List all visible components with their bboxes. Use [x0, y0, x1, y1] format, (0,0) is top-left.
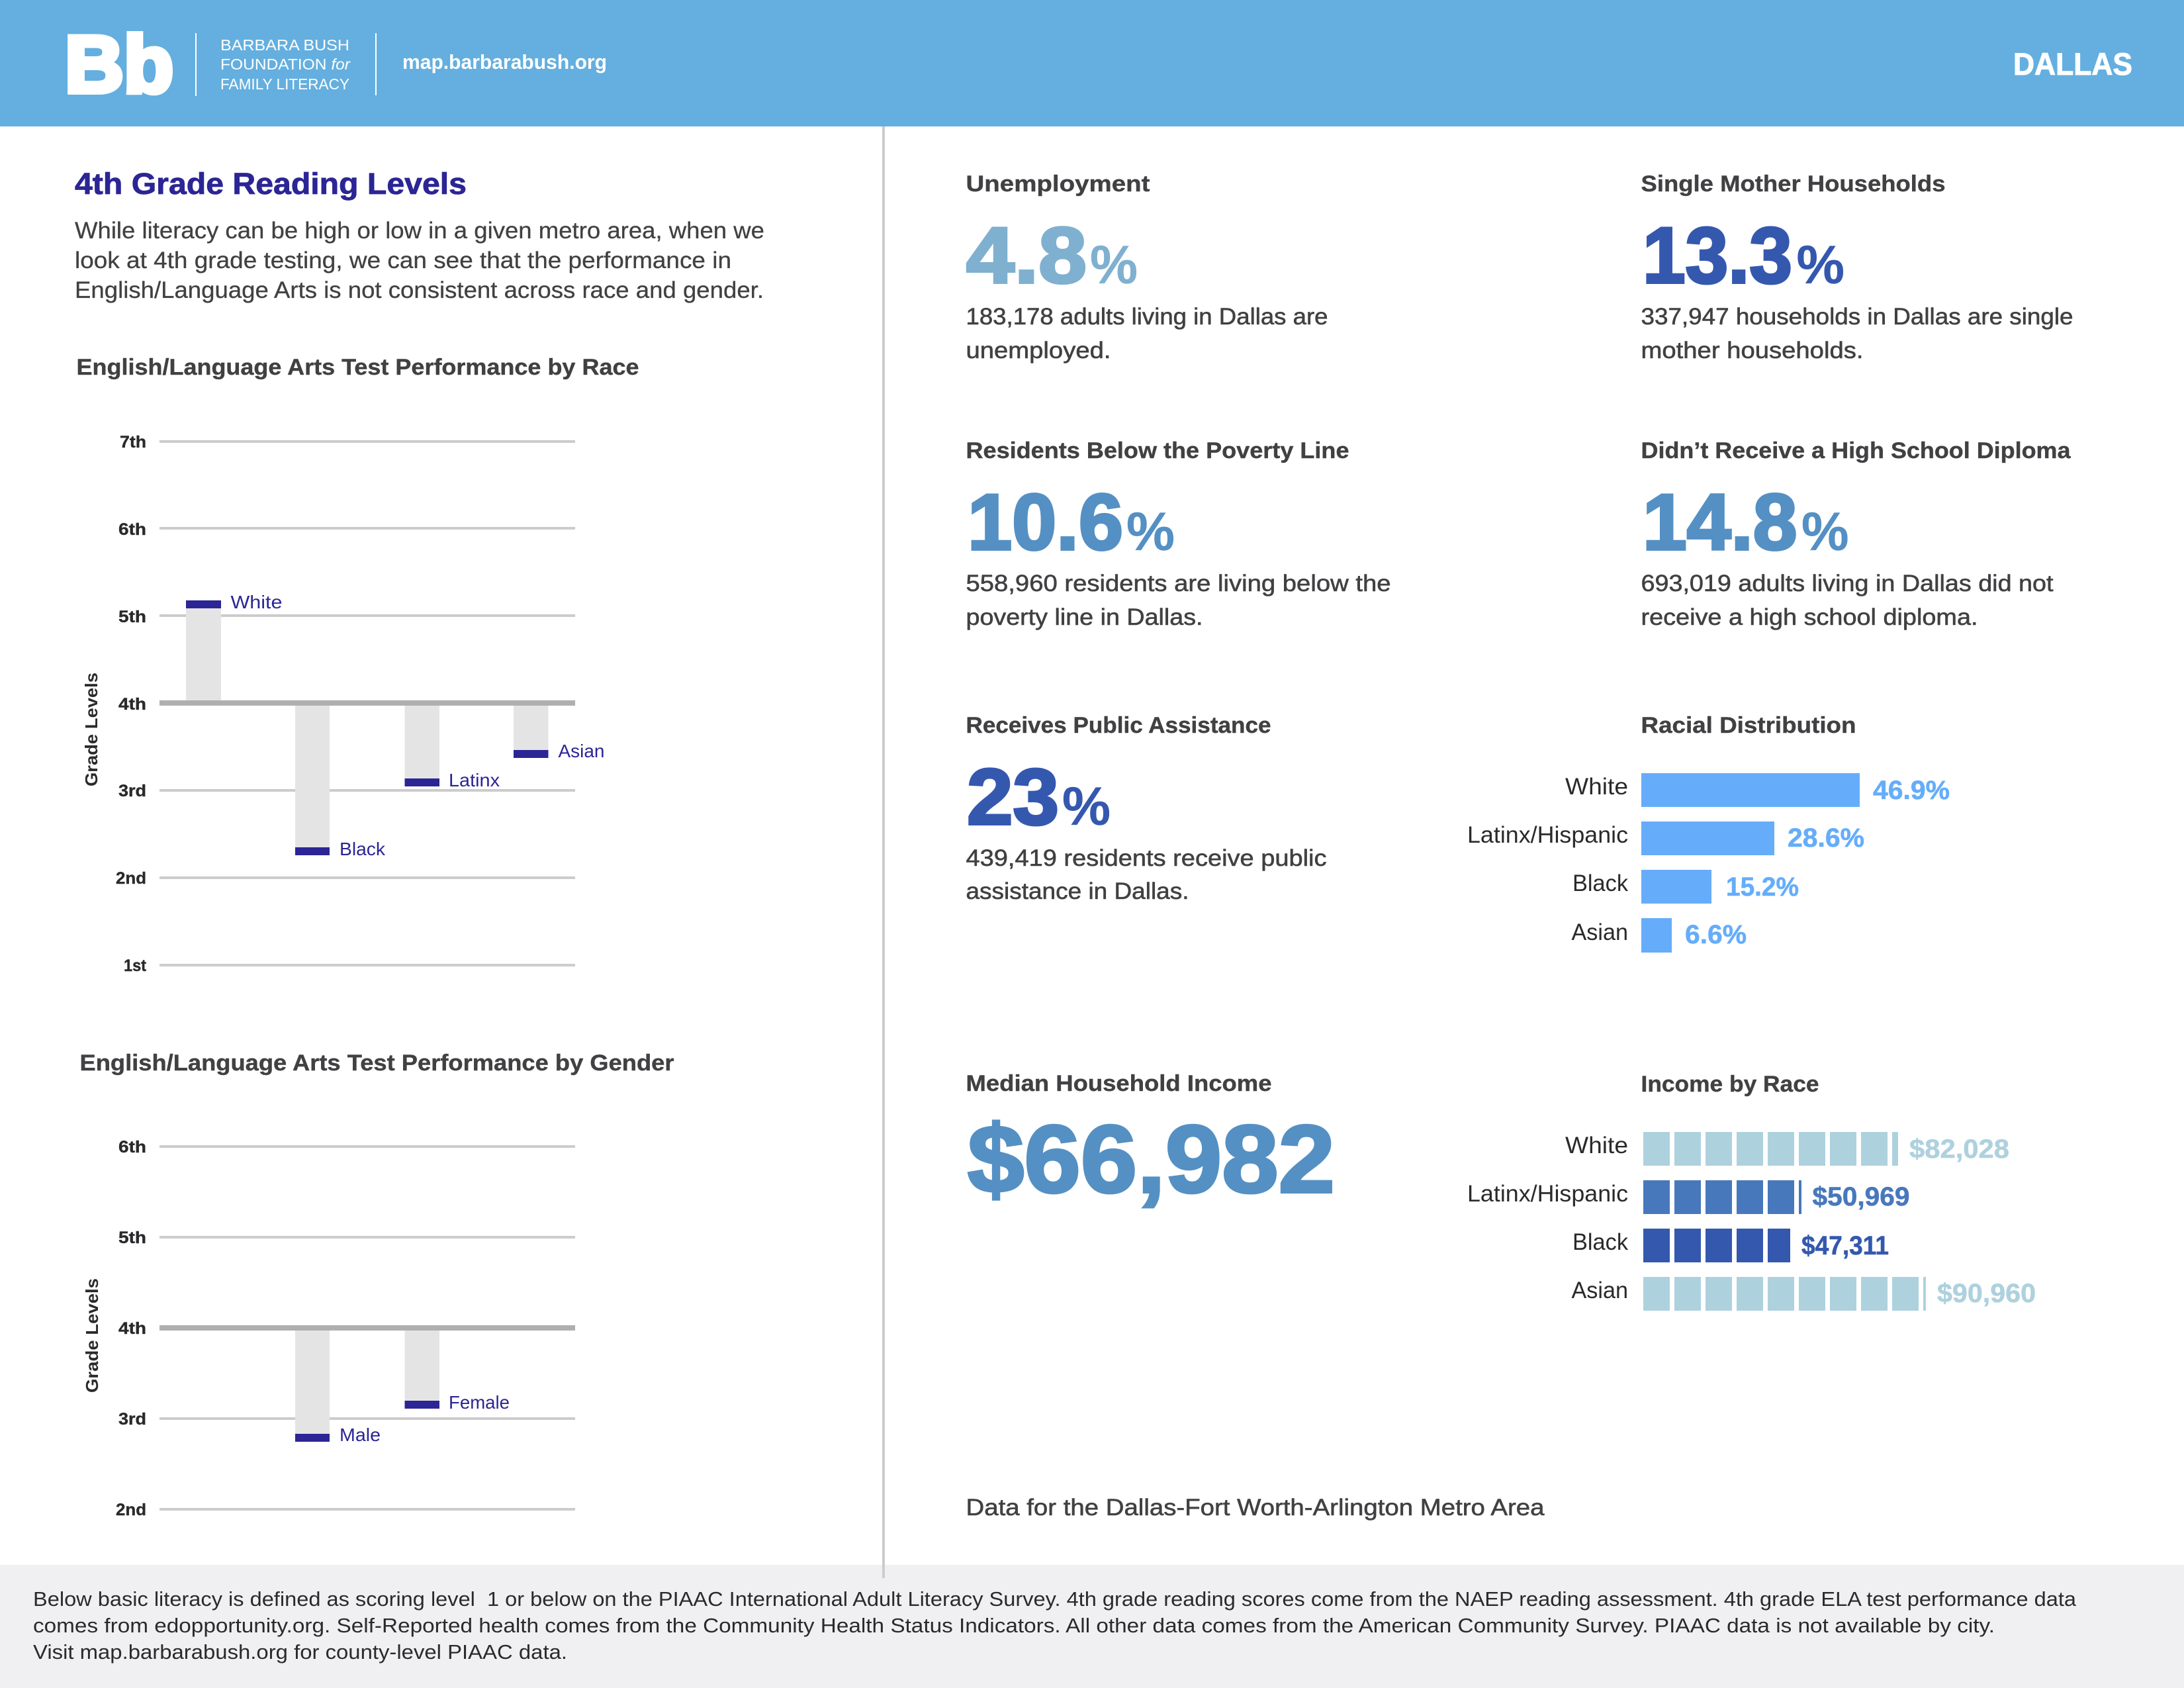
row: asian income	[1571, 1277, 2036, 1311]
bar: male: Male	[340, 1425, 381, 1445]
stat: poverty line: poverty line in Dallas.	[966, 604, 1203, 630]
row: black income	[1572, 1229, 1889, 1262]
stat: poverty line	[966, 438, 1391, 630]
grade axis labels: 4th	[118, 1319, 146, 1338]
row: black income: $47,311	[1801, 1231, 1889, 1260]
bar: asian	[514, 706, 605, 761]
bar: black	[295, 706, 386, 859]
row: asian	[1571, 918, 1747, 953]
stat: single mother households: %	[1796, 235, 1844, 295]
chart: income by race	[1467, 1072, 2036, 1311]
chart: performance by gender	[82, 1138, 575, 1519]
bar: female: Female	[449, 1392, 510, 1413]
4th grade baseline	[159, 1325, 575, 1331]
foundation name: FOUNDATION for	[220, 56, 351, 73]
stat: public assistance: 439,419 residents receive public	[966, 845, 1326, 871]
row: black: 15.2%	[1726, 872, 1799, 902]
stat: median household income: Median Household Income	[966, 1071, 1272, 1096]
grade axis labels: 1st	[124, 957, 147, 975]
row: asian income: $90,960	[1937, 1279, 2036, 1308]
grade axis labels: 3rd	[118, 1410, 146, 1429]
4th grade baseline	[159, 700, 575, 706]
stat: unemployment: 4.8	[966, 211, 1087, 300]
column divider	[882, 126, 885, 1578]
intro paragraph	[75, 218, 764, 303]
foundation name: FAMILY LITERACY	[220, 75, 349, 93]
grade axis labels: 7th	[120, 433, 146, 451]
footer notes	[33, 1588, 2076, 1664]
chart: racial distribution	[1467, 713, 1950, 953]
section title: 4th grade reading levels: 4th Grade Reading Levels	[75, 167, 467, 201]
bar: female	[405, 1331, 510, 1413]
stat: no high school diploma: 693,019 adults living in Dallas did not	[1641, 571, 2054, 596]
stat: single mother households: Single Mother Households	[1641, 171, 1946, 197]
grade axis labels: 2nd	[116, 1501, 146, 1519]
row: latinx/hispanic income: Latinx/Hispanic	[1467, 1181, 1628, 1207]
grade axis labels: 5th	[118, 1229, 146, 1247]
stat: unemployment: Unemployment	[966, 171, 1150, 197]
chart: performance by race	[81, 433, 605, 975]
stat: public assistance: Receives Public Assistance	[966, 713, 1271, 738]
grade axis labels	[116, 1138, 146, 1519]
stat: no high school diploma: Didn’t Receive a High School Diploma	[1641, 438, 2071, 463]
header banner	[0, 0, 2184, 126]
grade axis labels: 5th	[118, 608, 146, 626]
website url: map.barbarabush.org	[402, 50, 607, 73]
footer notes: comes from edopportunity.org. Self-Reported health comes from the Community Health Status Indicators. All other data comes from the American Community Survey. PIAAC data is not available by city.	[33, 1615, 1995, 1637]
data source note: Data for the Dallas-Fort Worth-Arlington Metro Area	[966, 1495, 1545, 1521]
heading: Income by Race	[1641, 1072, 1819, 1097]
row: latinx/hispanic: 28.6%	[1788, 823, 1864, 853]
grade axis labels: 6th	[118, 1138, 146, 1156]
row: white	[1565, 773, 1950, 807]
stat: no high school diploma: %	[1801, 502, 1849, 562]
row: white income	[1565, 1132, 2009, 1166]
row: black income: Black	[1572, 1229, 1628, 1255]
gridlines	[159, 440, 575, 966]
stat: poverty line: Residents Below the Poverty Line	[966, 438, 1349, 463]
row: latinx/hispanic: Latinx/Hispanic	[1467, 822, 1628, 848]
stat: no high school diploma: receive a high school diploma.	[1641, 604, 1978, 630]
stat: single mother households: 13.3	[1643, 211, 1792, 300]
stat: single mother households	[1641, 171, 2073, 363]
bar: latinx: Latinx	[449, 770, 500, 790]
bar: black: Black	[340, 839, 386, 859]
row: white income: $82,028	[1909, 1135, 2009, 1164]
row: latinx/hispanic income	[1467, 1180, 1910, 1214]
grade axis labels: 2nd	[116, 869, 146, 888]
logo divider	[195, 33, 197, 96]
stat: unemployment: %	[1090, 235, 1138, 295]
heading: performance by race: English/Language Arts Test Performance by Race	[77, 355, 639, 380]
stat: public assistance: %	[1062, 776, 1111, 837]
grade axis labels: 6th	[118, 520, 146, 539]
bar: latinx	[405, 706, 500, 790]
stat: no high school diploma: 14.8	[1643, 478, 1797, 567]
row: latinx/hispanic	[1467, 821, 1864, 855]
heading: Racial Distribution	[1641, 713, 1856, 738]
stat: unemployment	[966, 171, 1328, 363]
foundation name: BARBARA BUSH	[220, 36, 349, 54]
footer band	[0, 1565, 2184, 1688]
stat: median household income: $66,982	[968, 1105, 1335, 1213]
intro paragraph: English/Language Arts is not consistent across race and gender.	[75, 277, 764, 303]
row: white: 46.9%	[1873, 776, 1950, 805]
grade axis labels: 3rd	[118, 782, 146, 800]
footer notes: Visit map.barbarabush.org for county-level PIAAC data.	[33, 1641, 567, 1664]
stat: poverty line: 10.6	[968, 478, 1123, 567]
stat: no high school diploma	[1641, 438, 2071, 630]
city name: DALLAS	[2013, 46, 2132, 81]
row: asian: 6.6%	[1685, 920, 1747, 949]
foundation name	[220, 36, 351, 93]
row: white: White	[1565, 774, 1628, 800]
stat: unemployment: unemployed.	[966, 338, 1111, 363]
row: black	[1572, 870, 1799, 904]
row: asian: Asian	[1571, 919, 1628, 945]
bar: asian: Asian	[559, 741, 605, 761]
heading: performance by gender: English/Language Arts Test Performance by Gender	[79, 1051, 674, 1076]
bar: male	[295, 1331, 381, 1445]
row: white income: White	[1565, 1133, 1628, 1158]
stat: single mother households: mother households.	[1641, 338, 1864, 363]
gridlines	[159, 1145, 575, 1511]
footer notes: Below basic literacy is defined as scoring level 1 or below on the PIAAC International Adult Literacy Survey. 4th grade reading scores come from the NAEP reading assessment. 4th grade ELA test performance data	[33, 1588, 2076, 1611]
row: asian income: Asian	[1571, 1278, 1628, 1303]
header divider	[375, 33, 377, 95]
axis title: Grade Levels	[81, 673, 101, 786]
grade axis labels	[116, 433, 147, 975]
axis title: Grade Levels	[82, 1278, 102, 1393]
stat: public assistance: assistance in Dallas.	[966, 878, 1189, 904]
intro paragraph: look at 4th grade testing, we can see that the performance in	[75, 248, 731, 273]
stat: public assistance: 23	[967, 753, 1059, 841]
bar: white	[186, 592, 282, 700]
stat: public assistance	[966, 713, 1326, 904]
stat: poverty line: 558,960 residents are living below the	[966, 571, 1391, 596]
bar: white: White	[230, 592, 282, 612]
logo: Bb monogram: Bb	[65, 19, 173, 109]
row: latinx/hispanic income: $50,969	[1812, 1182, 1910, 1211]
intro paragraph: While literacy can be high or low in a given metro area, when we	[75, 218, 764, 244]
stat: poverty line: %	[1126, 502, 1175, 562]
grade axis labels: 4th	[118, 695, 146, 714]
stat: single mother households: 337,947 households in Dallas are single	[1641, 304, 2073, 330]
row: black: Black	[1572, 870, 1628, 896]
stat: unemployment: 183,178 adults living in Dallas are	[966, 304, 1328, 330]
